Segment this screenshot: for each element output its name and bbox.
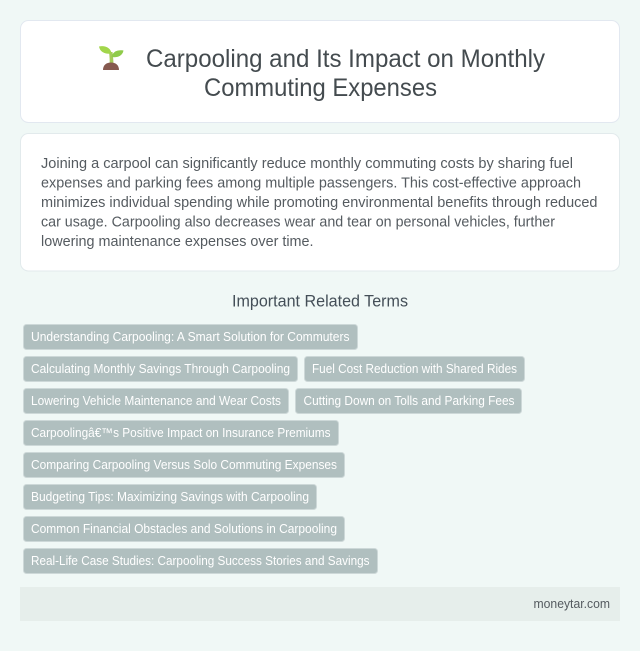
tag 4 bbox=[24, 388, 288, 414]
tag 8 bbox=[24, 484, 316, 510]
tag 10: Real-Life Case Studies: Carpooling Success Stories and Savings bbox=[31, 554, 370, 568]
summary text: lowering maintenance expenses over time. bbox=[41, 234, 314, 250]
panel: title bbox=[20, 20, 620, 122]
tag 1: Understanding Carpooling: A Smart Solution for Commuters bbox=[31, 330, 350, 344]
title text: Carpooling and Its Impact on Monthly bbox=[146, 45, 545, 73]
title text: Commuting Expenses bbox=[204, 74, 437, 102]
tag 8: Budgeting Tips: Maximizing Savings with Carpooling bbox=[31, 490, 309, 504]
footer source text: moneytar.com bbox=[534, 597, 610, 611]
tag 2 bbox=[24, 356, 298, 382]
tag 6: Carpoolingâ€™s Positive Impact on Insurance Premiums bbox=[31, 426, 330, 440]
footer bbox=[20, 587, 620, 621]
tag 5: Cutting Down on Tolls and Parking Fees bbox=[304, 394, 514, 408]
tag 9 bbox=[24, 516, 344, 542]
tag 3 bbox=[304, 356, 524, 382]
panel: summary bbox=[20, 134, 620, 271]
summary text bbox=[41, 156, 598, 250]
summary text: Joining a carpool can significantly reduce monthly commuting costs by sharing fuel bbox=[41, 156, 573, 172]
icon: seedling bbox=[99, 46, 124, 70]
tag 3: Fuel Cost Reduction with Shared Rides bbox=[312, 362, 517, 376]
tag list bbox=[24, 324, 524, 574]
tag 10 bbox=[24, 548, 378, 574]
heading: important related terms: Important Related Terms bbox=[232, 292, 408, 310]
summary text: car usage. Carpooling also decreases wear and tear on personal vehicles, further bbox=[41, 214, 555, 230]
tag 6 bbox=[24, 420, 338, 446]
title text bbox=[146, 45, 545, 102]
tag 4: Lowering Vehicle Maintenance and Wear Costs bbox=[31, 394, 281, 408]
tag 5 bbox=[296, 388, 522, 414]
tag 9: Common Financial Obstacles and Solutions in Carpooling bbox=[31, 522, 337, 536]
tag 1 bbox=[24, 324, 358, 350]
tag 2: Calculating Monthly Savings Through Carpooling bbox=[31, 362, 290, 376]
tag 7: Comparing Carpooling Versus Solo Commuting Expenses bbox=[31, 458, 337, 472]
summary text: expenses and parking fees among multiple passengers. This cost-effective approach bbox=[41, 176, 581, 192]
summary text: minimizes individual spending while promoting environmental benefits through reduced bbox=[41, 195, 598, 211]
tag 7 bbox=[24, 452, 344, 478]
